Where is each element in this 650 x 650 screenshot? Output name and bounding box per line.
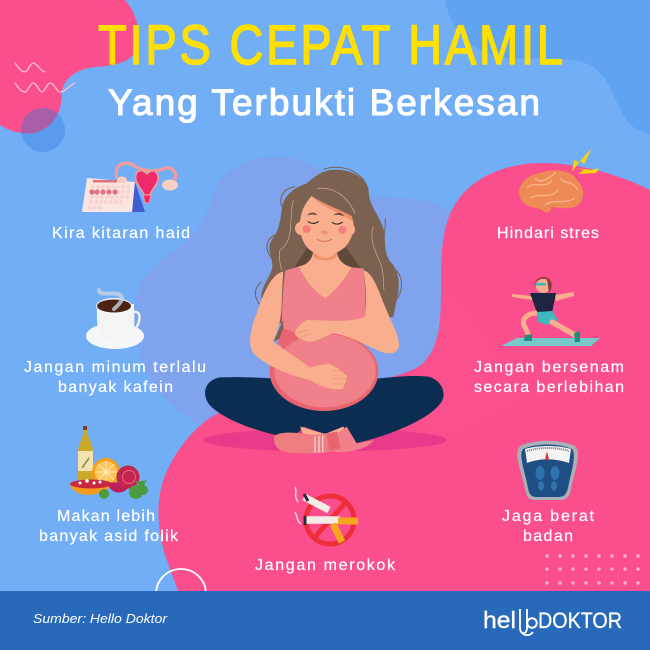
subtitle: Yang Terbukti Berkesan xyxy=(108,82,540,123)
title: TIPS CEPAT HAMIL xyxy=(98,13,563,76)
footer: logo: DOKTOR xyxy=(538,608,622,633)
label: Jangan minum terlalu / banyak kafein: banyak kafein xyxy=(58,379,173,396)
icon: weighing scale xyxy=(517,441,578,500)
footer bar xyxy=(0,591,650,650)
decoration: dots xyxy=(545,554,640,585)
icon: woman exercising xyxy=(501,277,600,346)
label: Kira kitaran haid: Kira kitaran haid xyxy=(52,225,190,242)
label: Jangan merokok: Jangan merokok xyxy=(255,557,396,574)
label: Jangan minum terlalu / banyak kafein: Jangan minum terlalu xyxy=(24,359,206,376)
decoration: white ring xyxy=(156,569,206,619)
illustration: pregnant woman xyxy=(203,167,447,453)
label: Jangan bersenam / secara berlebihan: Jangan bersenam xyxy=(474,359,624,376)
label: Jangan minum terlalu / banyak kafein xyxy=(24,359,206,396)
label: Jaga berat / badan xyxy=(502,508,595,545)
label: Makan lebih / banyak asid folik: Makan lebih xyxy=(57,508,155,525)
icon: brain xyxy=(519,148,599,212)
label: Jangan bersenam / secara berlebihan: secara berlebihan xyxy=(474,379,624,396)
icon: folic acid foods xyxy=(70,426,148,499)
label: Jaga berat / badan: Jaga berat xyxy=(502,508,595,525)
footer: logo xyxy=(483,607,622,635)
blob: periwinkle behind woman xyxy=(135,157,460,440)
label: Jaga berat / badan: badan xyxy=(523,528,573,545)
label: Hindari stres: Hindari stres xyxy=(497,225,599,242)
blob: main pink xyxy=(158,163,650,591)
footer: source: Sumber: Hello Doktor xyxy=(33,611,168,626)
decoration: waves xyxy=(15,63,75,92)
icon: coffee cup xyxy=(86,290,144,349)
blob: top left pink xyxy=(0,0,138,133)
decoration: circle xyxy=(21,108,65,152)
label: Jangan bersenam / secara berlebihan xyxy=(474,359,624,396)
icon: calendar and uterus xyxy=(82,163,178,212)
blob: top right xyxy=(445,0,650,135)
footer: logo: hel xyxy=(483,607,516,633)
label: Makan lebih / banyak asid folik xyxy=(39,508,179,545)
icon: no smoking xyxy=(295,487,358,544)
blob: faint pink shade xyxy=(420,290,515,435)
label: Makan lebih / banyak asid folik: banyak asid folik xyxy=(39,528,179,545)
